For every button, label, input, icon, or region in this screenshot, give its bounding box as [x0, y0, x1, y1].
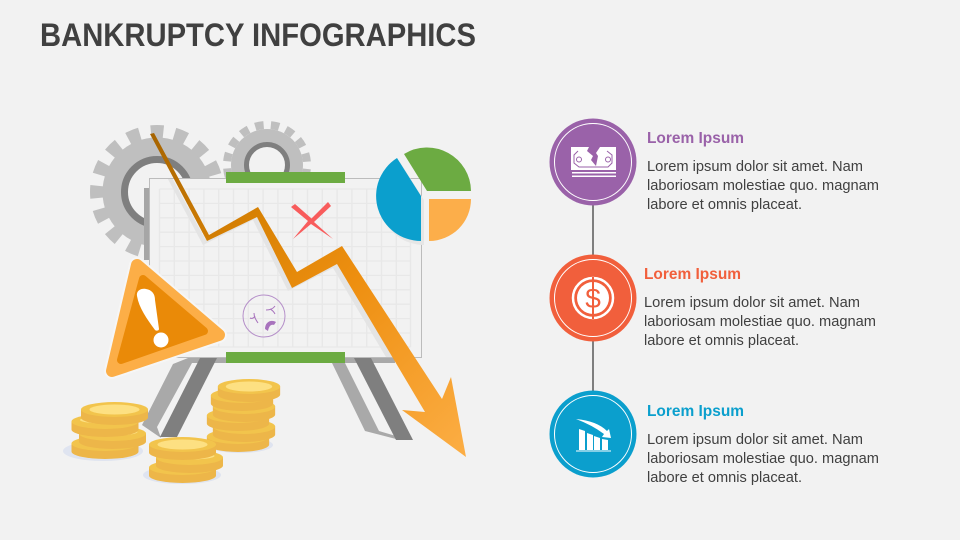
falling arrow — [150, 133, 466, 457]
text block: labore et omnis placeat. — [644, 333, 799, 349]
text block: laboriosam molestiae quo. magnam — [647, 451, 879, 467]
heading: Lorem Ipsum — [647, 130, 744, 147]
arrow shadow — [168, 179, 392, 357]
icon: large gear — [96, 132, 218, 252]
text block — [647, 432, 879, 486]
illustration: bankruptcy chart scene — [63, 118, 471, 484]
text block: laboriosam molestiae quo. magnam — [647, 178, 879, 194]
heading: Lorem Ipsum — [644, 266, 741, 283]
sad face icon — [243, 295, 285, 337]
text block: Lorem ipsum dolor sit amet. Nam — [647, 432, 863, 448]
pie slice: orange — [429, 199, 471, 241]
board back shadow — [144, 188, 150, 260]
right stand legs — [332, 357, 413, 440]
board — [150, 178, 422, 358]
board grid — [160, 189, 410, 347]
icon: declining bar chart — [550, 390, 636, 478]
icon: small gear — [220, 118, 314, 212]
icon: torn banknote — [550, 118, 636, 206]
pie slice: green — [404, 148, 471, 191]
pie slice: blue — [376, 158, 421, 241]
text block: Lorem ipsum dolor sit amet. Nam — [647, 159, 863, 175]
coin stack: left — [63, 402, 148, 461]
board top clip — [226, 172, 345, 183]
text block: Lorem ipsum dolor sit amet. Nam — [644, 295, 860, 311]
item 3: blue — [550, 390, 879, 486]
item 1: purple — [550, 118, 879, 213]
coin stack: middle — [143, 437, 223, 484]
warning triangle — [112, 265, 219, 371]
text block: labore et omnis placeat. — [647, 197, 802, 213]
pie shadow — [379, 162, 424, 245]
text block — [644, 295, 876, 349]
item 2: orange-red — [550, 254, 876, 349]
text block: labore et omnis placeat. — [647, 470, 802, 486]
coin stack: right — [207, 379, 280, 453]
exclamation mark — [137, 289, 159, 331]
heading: Lorem Ipsum — [647, 403, 744, 420]
pie chart — [376, 148, 471, 245]
connector line — [592, 204, 594, 392]
board bottom clip — [226, 352, 345, 363]
title: BANKRUPTCY INFOGRAPHICS — [40, 17, 476, 53]
icon: dollar coin — [550, 254, 636, 342]
red cross mark — [291, 202, 333, 239]
left stand legs — [142, 358, 226, 438]
text block — [647, 159, 879, 213]
icon: dollar coin: $ — [585, 283, 601, 314]
text block: laboriosam molestiae quo. magnam — [644, 314, 876, 330]
